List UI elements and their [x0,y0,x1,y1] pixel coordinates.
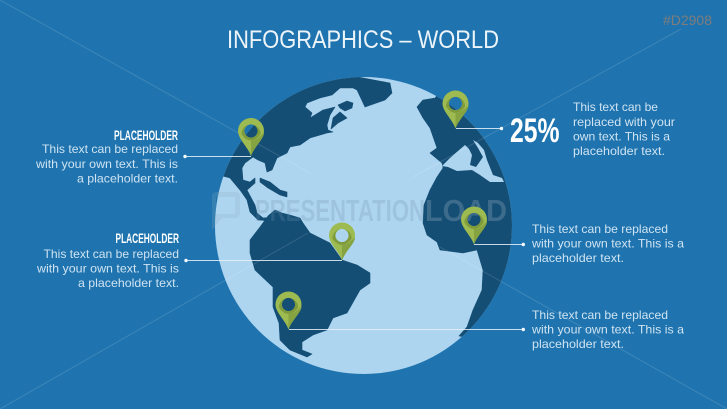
text block: upper right: This text can be [573,100,658,114]
text block: upper left: a placeholder text. [77,172,178,186]
text block: lower left: a placeholder text. [78,276,179,290]
continent: europe, asia and africa [416,96,512,337]
text block: middle right: This text can be replaced [532,222,668,236]
caribbean island [260,178,287,197]
text block: upper left: with your own text. This is [35,157,178,171]
text block: upper left: This text can be replaced [42,142,178,156]
watermark: PRESENTATION [255,193,425,228]
pin: north america [238,118,264,156]
pin: africa [461,206,487,244]
text block: lower left [36,231,179,290]
title: INFOGRAPHICS – WORLD [227,26,499,54]
text block: upper right: own text. This is a [573,130,670,144]
stat: 25 percent: 25% [510,112,560,150]
mediterranean and red sea [442,140,504,182]
watermark: LOAD [425,193,507,228]
pin: argentina [276,292,302,330]
text block: lower left: with your own text. This is [36,262,179,276]
text block: lower right: This text can be replaced [532,308,668,322]
arctic island [338,101,353,111]
continent: south america [250,210,370,357]
continent: north america and greenland [223,77,392,221]
slide id code: #D2908 [663,12,712,28]
pin: europe [442,90,468,128]
pin: brazil [329,222,355,260]
text block: lower right: placeholder text. [532,337,624,351]
text block: lower right [531,308,684,351]
arctic island lower [331,112,347,129]
text block: lower right: with your own text. This is a [531,322,684,336]
text block: upper right [573,100,675,158]
globe [215,77,512,374]
text block: lower left: This text can be replaced [44,247,179,261]
text block: middle right [531,222,684,265]
text block: middle right: with your own text. This is a [531,236,684,250]
text block: upper right: placeholder text. [573,144,665,158]
text block: upper right: replaced with your [573,115,675,129]
text block: upper left [35,128,178,186]
connector lines [183,127,525,331]
text block: upper left: PLACEHOLDER [114,128,178,143]
text block: middle right: placeholder text. [532,251,624,265]
text block: lower left: PLACEHOLDER [116,231,179,246]
